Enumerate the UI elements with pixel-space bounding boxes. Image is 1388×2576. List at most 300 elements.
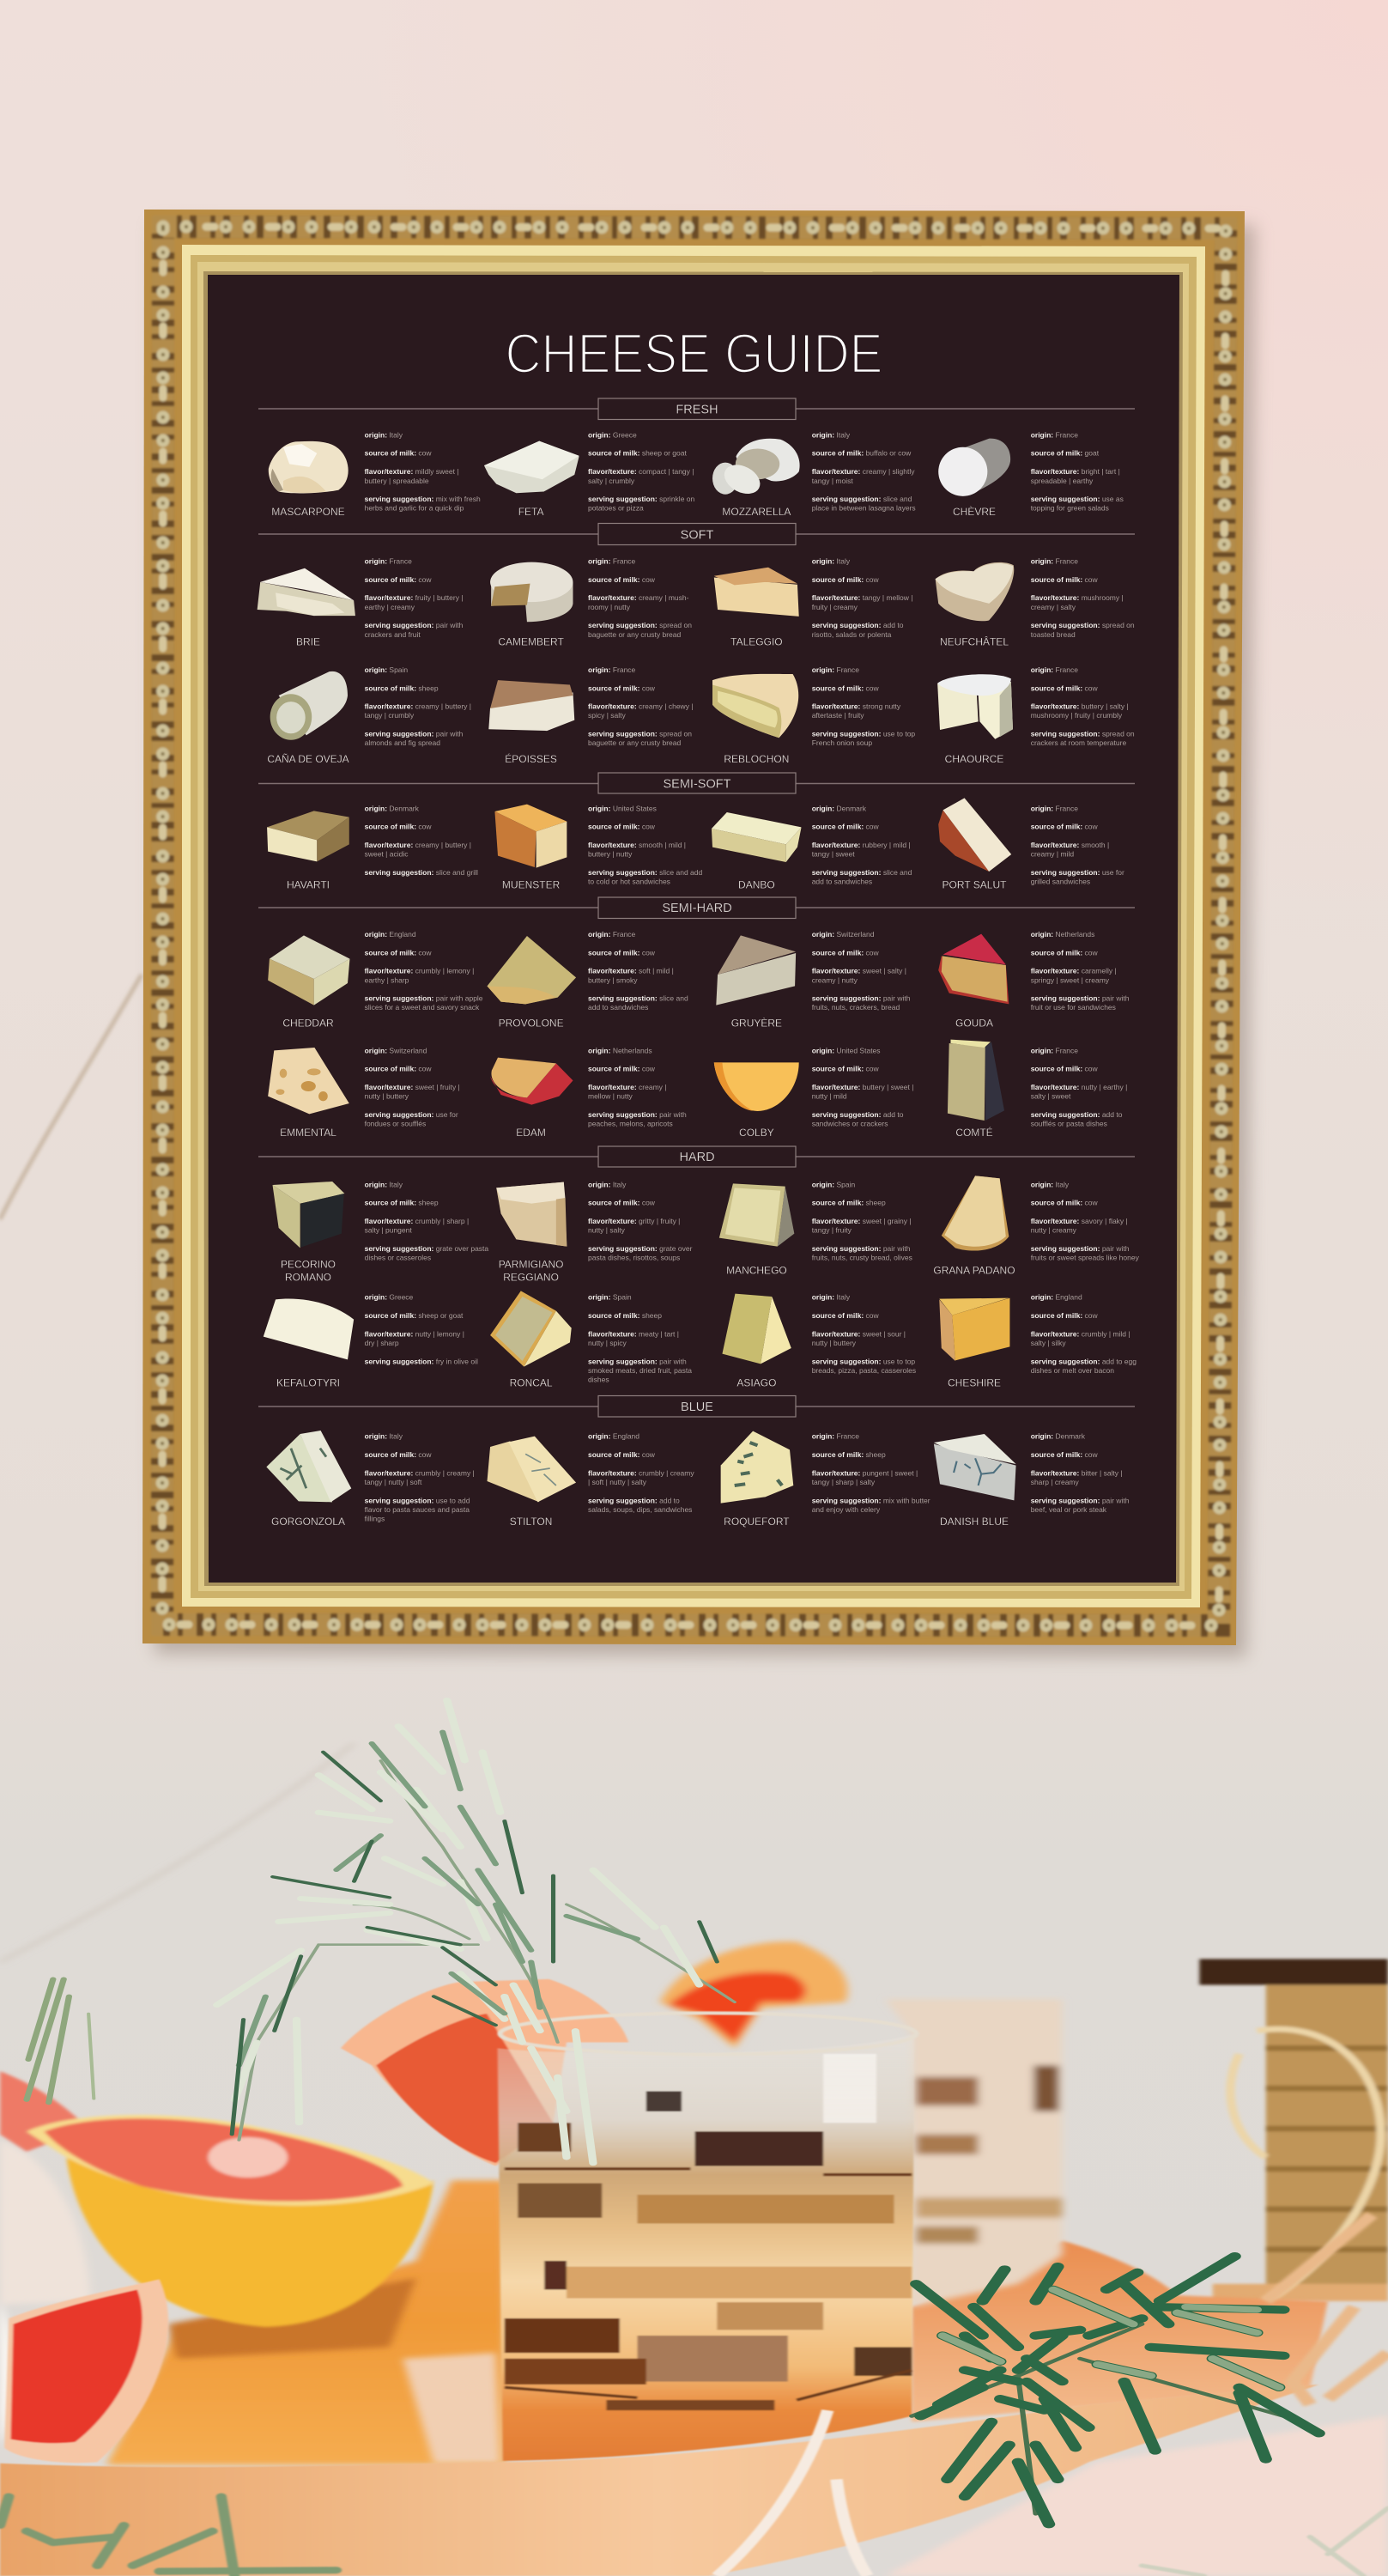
details: flavor/texture: smooth | bbox=[1031, 841, 1109, 849]
details: nutty | spicy bbox=[588, 1339, 627, 1347]
details: source of milk: cow bbox=[365, 1065, 432, 1073]
details: serving suggestion: mix with fresh bbox=[365, 495, 481, 503]
details: salty | silky bbox=[1031, 1339, 1066, 1347]
icon: chaource bbox=[937, 674, 1013, 739]
rosemary sprig on tray bbox=[912, 2257, 1319, 2524]
details: to cold or hot sandwiches bbox=[588, 877, 670, 885]
name: STILTON bbox=[510, 1516, 552, 1528]
details: soufflés or pasta dishes bbox=[1031, 1120, 1107, 1128]
details: flavor/texture: crumbly | lemony | bbox=[365, 967, 474, 975]
details bbox=[365, 431, 481, 513]
details: origin: France bbox=[588, 930, 636, 939]
details: French onion soup bbox=[812, 738, 872, 747]
rosemary sprig in glass bbox=[217, 1700, 735, 2163]
details: serving suggestion: sprinkle on bbox=[588, 495, 695, 503]
details: serving suggestion: use as bbox=[1031, 495, 1124, 503]
details: tangy | crumbly bbox=[365, 711, 415, 720]
details: source of milk: cow bbox=[365, 449, 432, 458]
details: serving suggestion: add to bbox=[588, 1496, 680, 1504]
details: tangy | sharp | salty bbox=[812, 1478, 876, 1486]
details: serving suggestion: pair with bbox=[588, 1357, 687, 1365]
cheese: provolone bbox=[487, 930, 688, 1030]
name: HAVARTI bbox=[287, 879, 330, 891]
name: FETA bbox=[518, 506, 543, 518]
details: potatoes or pizza bbox=[588, 504, 644, 513]
details: flavor/texture: bitter | salty | bbox=[1031, 1468, 1123, 1477]
details: fruits, nuts, crusty bread, olives bbox=[812, 1254, 912, 1262]
details: serving suggestion: slice and bbox=[588, 994, 688, 1003]
cheese: pecorino romano bbox=[272, 1180, 488, 1283]
faint background branch bbox=[0, 1743, 354, 1962]
name line 2: REGGIANO bbox=[503, 1271, 559, 1283]
details: mushroomy | fruity | crumbly bbox=[1031, 711, 1123, 720]
cheese: grana padano bbox=[933, 1176, 1140, 1276]
icon: cana de oveja bbox=[270, 671, 348, 740]
details: source of milk: cow bbox=[812, 823, 880, 831]
cheese: brie bbox=[258, 556, 464, 647]
details: source of milk: cow bbox=[365, 949, 432, 957]
grapefruit wedge bbox=[4, 2279, 168, 2463]
details: flavor/texture: strong nutty bbox=[812, 702, 901, 710]
cheese: danish blue bbox=[934, 1432, 1130, 1528]
details: flavor/texture: crumbly | sharp | bbox=[365, 1217, 469, 1225]
icon: pecorino romano bbox=[272, 1182, 344, 1248]
icon: port salut bbox=[938, 798, 1011, 872]
icon: cheshire bbox=[939, 1298, 1009, 1361]
floating rosemary sprig bbox=[27, 1979, 94, 2103]
details: aftertaste | fruity bbox=[812, 711, 864, 720]
details: flavor/texture: nutty | lemony | bbox=[365, 1329, 464, 1338]
details: serving suggestion: use for bbox=[1031, 868, 1124, 877]
details: fruits or sweet spreads like honey bbox=[1031, 1254, 1140, 1262]
details: nutty | salty bbox=[588, 1226, 626, 1235]
icon: feta bbox=[484, 441, 579, 493]
name: COLBY bbox=[739, 1127, 774, 1139]
details: baguette or any crusty bread bbox=[588, 738, 681, 747]
details: serving suggestion: add to bbox=[1031, 1110, 1123, 1119]
details bbox=[365, 930, 483, 1012]
details: salads, soups, dips, sandwiches bbox=[588, 1505, 692, 1514]
icon: provolone bbox=[487, 936, 576, 1004]
icon: comte bbox=[948, 1040, 1004, 1121]
icon: emmental bbox=[268, 1048, 349, 1114]
details: serving suggestion: pair with bbox=[1031, 1496, 1130, 1504]
name: GORGONZOLA bbox=[271, 1516, 345, 1528]
icon: cheddar bbox=[268, 935, 349, 1005]
tray surface left bbox=[106, 2180, 505, 2465]
name: KEFALOTYRI bbox=[276, 1377, 340, 1389]
details: source of milk: sheep bbox=[588, 1311, 662, 1320]
icon: mascarpone bbox=[269, 441, 349, 493]
white objects left bbox=[0, 2140, 90, 2445]
details: buttery | nutty bbox=[588, 850, 633, 859]
details: tangy | sweet bbox=[812, 850, 855, 859]
details: origin: France bbox=[1031, 665, 1078, 674]
details: flavor/texture: soft | mild | bbox=[588, 967, 674, 975]
details bbox=[588, 930, 688, 1012]
icon: roquefort bbox=[721, 1431, 793, 1504]
details: flavor/texture: buttery | salty | bbox=[1031, 702, 1129, 710]
details: origin: France bbox=[1031, 1046, 1078, 1054]
details: flavor/texture: creamy | chewy | bbox=[588, 702, 694, 710]
details: source of milk: cow bbox=[588, 683, 656, 692]
details: flavor/texture: tangy | mellow | bbox=[812, 593, 912, 602]
details: origin: Italy bbox=[1031, 1180, 1070, 1188]
details: add to sandwiches bbox=[812, 877, 872, 885]
icon: brie bbox=[258, 568, 355, 616]
details: origin: France bbox=[588, 556, 636, 565]
cheese: roquefort bbox=[721, 1431, 930, 1528]
details: source of milk: cow bbox=[1031, 1199, 1099, 1207]
details: origin: United States bbox=[588, 804, 657, 812]
details: origin: England bbox=[1031, 1293, 1082, 1302]
details: source of milk: cow bbox=[1031, 949, 1099, 957]
section heading: fresh: FRESH bbox=[676, 404, 718, 417]
details: source of milk: cow bbox=[365, 575, 432, 584]
details: serving suggestion: pair with bbox=[365, 730, 464, 738]
details: serving suggestion: mix with butter bbox=[812, 1496, 930, 1504]
cheese: manchego bbox=[719, 1180, 912, 1276]
details: crackers at room temperature bbox=[1031, 738, 1126, 747]
details: flavor to pasta sauces and pasta bbox=[365, 1505, 470, 1514]
icon: colby bbox=[714, 1062, 799, 1111]
cheese: asiago bbox=[722, 1293, 916, 1389]
details: serving suggestion: pair with bbox=[1031, 1244, 1130, 1253]
poster bbox=[208, 275, 1179, 1583]
details: flavor/texture: sweet | grainy | bbox=[812, 1217, 912, 1225]
details: dry | sharp bbox=[365, 1339, 399, 1347]
details: origin: United States bbox=[812, 1046, 881, 1054]
details: flavor/texture: crumbly | creamy | bbox=[365, 1468, 475, 1477]
details bbox=[588, 804, 702, 885]
name: ROQUEFORT bbox=[724, 1516, 790, 1528]
details: origin: Italy bbox=[812, 431, 851, 440]
details: origin: Italy bbox=[365, 431, 403, 440]
details: flavor/texture: buttery | sweet | bbox=[812, 1083, 913, 1091]
details: dishes or casseroles bbox=[365, 1254, 431, 1262]
details: flavor/texture: mildly sweet | bbox=[365, 467, 459, 476]
name: PECORINO bbox=[281, 1259, 336, 1271]
details: fruit or use for sandwiches bbox=[1031, 1003, 1116, 1012]
details bbox=[812, 930, 911, 1012]
name: NEUFCHÂTEL bbox=[940, 635, 1009, 647]
details: flavor/texture: mushroomy | bbox=[1031, 593, 1124, 602]
details: flavor/texture: bright | tart | bbox=[1031, 467, 1120, 476]
details bbox=[812, 665, 915, 747]
details: origin: England bbox=[365, 930, 416, 939]
details: source of milk: cow bbox=[1031, 683, 1099, 692]
icon: stilton bbox=[487, 1437, 576, 1502]
details: origin: France bbox=[812, 665, 859, 674]
details: grilled sandwiches bbox=[1031, 877, 1090, 885]
details: slices for a sweet and savory snack bbox=[365, 1003, 480, 1012]
details bbox=[365, 804, 478, 877]
icon: asiago bbox=[722, 1294, 791, 1364]
details bbox=[812, 804, 912, 885]
cheese: kefalotyri bbox=[264, 1293, 478, 1389]
details: fillings bbox=[365, 1515, 385, 1523]
details: origin: Netherlands bbox=[588, 1046, 652, 1054]
name: TALEGGIO bbox=[730, 635, 783, 647]
name: BRIE bbox=[296, 635, 320, 647]
name: CHEDDAR bbox=[282, 1018, 334, 1030]
name: MUENSTER bbox=[502, 879, 561, 891]
details: serving suggestion: spread on bbox=[588, 621, 692, 629]
section heading: semi-hard bbox=[258, 897, 1135, 919]
name: RONCAL bbox=[510, 1377, 553, 1389]
details: source of milk: sheep bbox=[812, 1450, 886, 1459]
icon: parmigiano reggiano bbox=[496, 1182, 567, 1247]
details: flavor/texture: creamy | mush- bbox=[588, 593, 689, 602]
icon: taleggio bbox=[714, 568, 799, 617]
details: breads, pizza, pasta, casseroles bbox=[812, 1366, 916, 1375]
details: peaches, melons, apricots bbox=[588, 1120, 673, 1128]
details bbox=[812, 1432, 930, 1514]
cheese: emmental bbox=[268, 1046, 460, 1139]
details: serving suggestion: add to egg bbox=[1031, 1357, 1136, 1365]
details: creamy | salty bbox=[1031, 603, 1076, 611]
details: flavor/texture: creamy | buttery | bbox=[365, 841, 471, 849]
details bbox=[365, 665, 471, 747]
details: origin: Greece bbox=[588, 431, 637, 440]
details: dishes or melt over bacon bbox=[1031, 1366, 1114, 1375]
icon: mozzarella bbox=[712, 439, 800, 500]
cheese: roncal bbox=[490, 1291, 692, 1389]
details: spreadable | earthy bbox=[1031, 477, 1094, 485]
cheese: gruyere bbox=[716, 930, 911, 1030]
icon: gorgonzola bbox=[266, 1431, 351, 1502]
cheese: danbo bbox=[712, 804, 912, 891]
tray surface right bbox=[912, 2241, 1328, 2421]
details: source of milk: sheep or goat bbox=[588, 449, 687, 458]
name: PARMIGIANO bbox=[499, 1259, 563, 1271]
details: flavor/texture: nutty | earthy | bbox=[1031, 1083, 1127, 1091]
front glass bbox=[498, 2013, 916, 2461]
details: origin: Italy bbox=[812, 556, 851, 565]
cheese: cheddar bbox=[268, 930, 483, 1030]
details: origin: France bbox=[1031, 556, 1078, 565]
icon: danish blue bbox=[934, 1434, 1016, 1500]
details: fruits, nuts, crackers, bread bbox=[812, 1003, 900, 1012]
details: mellow | nutty bbox=[588, 1092, 633, 1101]
details: toasted bread bbox=[1031, 630, 1076, 639]
details bbox=[812, 556, 912, 639]
icon: muenster bbox=[494, 805, 567, 868]
details: origin: Denmark bbox=[1031, 1432, 1086, 1441]
details: flavor/texture: caramelly | bbox=[1031, 967, 1117, 975]
details: crackers and fruit bbox=[365, 630, 421, 639]
name: CAMEMBERT bbox=[498, 635, 564, 647]
details bbox=[1031, 1180, 1140, 1262]
cheese: colby bbox=[714, 1046, 913, 1139]
details: origin: France bbox=[365, 556, 412, 565]
details: flavor/texture: compact | tangy | bbox=[588, 467, 694, 476]
details: flavor/texture: meaty | tart | bbox=[588, 1329, 679, 1338]
details: serving suggestion: slice and bbox=[812, 495, 912, 503]
cheese: chevre bbox=[938, 431, 1124, 518]
details bbox=[588, 556, 692, 639]
details: | soft | nutty | salty bbox=[588, 1478, 647, 1486]
details: source of milk: cow bbox=[1031, 575, 1099, 584]
cheese: port salut bbox=[938, 798, 1124, 891]
name: COMTÉ bbox=[955, 1126, 993, 1139]
details: serving suggestion: grate over bbox=[588, 1244, 693, 1253]
frame drop shadow bbox=[155, 223, 1255, 1657]
details: serving suggestion: pair with bbox=[365, 621, 464, 629]
details: almonds and fig spread bbox=[365, 738, 440, 747]
cheese: feta bbox=[484, 431, 695, 518]
name: MOZZARELLA bbox=[722, 506, 791, 518]
section heading: blue: BLUE bbox=[681, 1400, 713, 1414]
details: flavor/texture: fruity | buttery | bbox=[365, 593, 464, 602]
icon: havarti bbox=[267, 811, 349, 861]
details: salty | pungent bbox=[365, 1226, 412, 1235]
shadow under grapefruit bbox=[168, 2278, 416, 2359]
details: flavor/texture: sweet | fruity | bbox=[365, 1083, 460, 1091]
details: flavor/texture: rubbery | mild | bbox=[812, 841, 911, 849]
details: origin: Italy bbox=[365, 1180, 403, 1188]
details: herbs and garlic for a quick dip bbox=[365, 504, 464, 513]
details: tangy | nutty | soft bbox=[365, 1478, 422, 1486]
icon: reblochon bbox=[712, 674, 798, 738]
details: nutty | creamy bbox=[1031, 1226, 1077, 1235]
photo scene: cocktail on tray bbox=[0, 1700, 1388, 2576]
cheese: cheshire bbox=[939, 1293, 1136, 1389]
details: salty | crumbly bbox=[588, 477, 635, 485]
details bbox=[365, 1293, 478, 1365]
details: source of milk: goat bbox=[1031, 449, 1100, 458]
name: CHAOURCE bbox=[945, 753, 1003, 765]
details: flavor/texture: crumbly | mild | bbox=[1031, 1329, 1130, 1338]
details: earthy | creamy bbox=[365, 603, 415, 611]
details bbox=[1031, 1432, 1130, 1514]
icon: kefalotyri bbox=[264, 1299, 354, 1359]
cheese: parmigiano reggiano bbox=[496, 1180, 693, 1283]
details: dishes bbox=[588, 1376, 609, 1384]
details: creamy | mild bbox=[1031, 850, 1074, 859]
details: flavor/texture: gritty | fruity | bbox=[588, 1217, 680, 1225]
details bbox=[812, 1046, 913, 1128]
cheese: comte bbox=[948, 1040, 1127, 1139]
name: DANISH BLUE bbox=[940, 1516, 1009, 1528]
details: source of milk: cow bbox=[1031, 1065, 1099, 1073]
details: flavor/texture: savory | flaky | bbox=[1031, 1217, 1128, 1225]
icon: chevre bbox=[938, 439, 1010, 496]
details: serving suggestion: spread on bbox=[1031, 730, 1135, 738]
details: serving suggestion: pair with bbox=[588, 1110, 687, 1119]
details bbox=[812, 1180, 912, 1262]
details bbox=[812, 1293, 916, 1375]
section heading: blue bbox=[258, 1396, 1135, 1417]
cheese: mozzarella bbox=[712, 431, 916, 518]
cheese: neufchatel bbox=[936, 556, 1135, 647]
grapefruit half bbox=[0, 2071, 433, 2327]
tray handle bbox=[1266, 2215, 1388, 2404]
name: DANBO bbox=[738, 879, 775, 891]
details bbox=[365, 1046, 460, 1128]
details: origin: Denmark bbox=[365, 804, 420, 812]
details bbox=[365, 556, 464, 639]
details: source of milk: cow bbox=[812, 683, 880, 692]
details: sharp | creamy bbox=[1031, 1478, 1080, 1486]
details bbox=[588, 1046, 687, 1128]
name: CAÑA DE OVEJA bbox=[267, 753, 349, 765]
section heading: hard: HARD bbox=[679, 1151, 715, 1164]
details: serving suggestion: spread on bbox=[588, 730, 692, 738]
icon: manchego bbox=[719, 1183, 794, 1247]
icon: gouda bbox=[938, 934, 1009, 1004]
cheese: cana de oveja bbox=[267, 665, 471, 765]
icon: epoisses bbox=[488, 680, 574, 731]
section heading: soft: SOFT bbox=[681, 529, 713, 543]
details: source of milk: sheep bbox=[365, 1199, 439, 1207]
icon: roncal bbox=[490, 1291, 572, 1367]
details: source of milk: buffalo or cow bbox=[812, 449, 912, 458]
cheese: gorgonzola bbox=[266, 1431, 475, 1528]
name: ÉPOISSES bbox=[505, 752, 557, 765]
details: source of milk: cow bbox=[365, 823, 432, 831]
cheese: reblochon bbox=[712, 665, 915, 765]
details: origin: Italy bbox=[588, 1180, 627, 1188]
cheese: camembert bbox=[490, 556, 692, 647]
details bbox=[1031, 930, 1130, 1012]
cheese: chaource bbox=[937, 665, 1135, 765]
name: ASIAGO bbox=[736, 1377, 776, 1389]
details: source of milk: cow bbox=[812, 949, 880, 957]
details: and enjoy with celery bbox=[812, 1505, 881, 1514]
details: flavor/texture: creamy | slightly bbox=[812, 467, 915, 476]
details: serving suggestion: grate over pasta bbox=[365, 1244, 488, 1253]
details: flavor/texture: creamy | buttery | bbox=[365, 702, 471, 710]
blurred twig on wall bbox=[0, 975, 142, 1219]
details bbox=[1031, 431, 1124, 513]
details: origin: France bbox=[1031, 431, 1078, 440]
details: source of milk: sheep or goat bbox=[365, 1311, 464, 1320]
details: topping for green salads bbox=[1031, 504, 1109, 513]
details: tangy | fruity bbox=[812, 1226, 852, 1235]
details: add to sandwiches bbox=[588, 1003, 648, 1012]
section heading: hard bbox=[258, 1146, 1135, 1167]
details bbox=[588, 1293, 692, 1384]
details: origin: Spain bbox=[812, 1180, 856, 1188]
cheese: muenster bbox=[494, 804, 702, 891]
details: smoked meats, dried fruit, pasta bbox=[588, 1366, 692, 1375]
details: source of milk: cow bbox=[588, 1199, 656, 1207]
icon: edam bbox=[490, 1058, 573, 1105]
details: buttery | smoky bbox=[588, 975, 638, 984]
name: PROVOLONE bbox=[499, 1018, 564, 1030]
tray reflection bbox=[403, 2353, 500, 2464]
spool of twine bbox=[1199, 1959, 1388, 2301]
details: nutty | buttery bbox=[812, 1339, 857, 1347]
details: serving suggestion: use to top bbox=[812, 730, 915, 738]
details: source of milk: cow bbox=[812, 1065, 880, 1073]
details: source of milk: cow bbox=[588, 823, 656, 831]
details: origin: Spain bbox=[365, 665, 408, 674]
section heading: semi-soft bbox=[258, 773, 1135, 793]
details bbox=[1031, 665, 1135, 747]
details: source of milk: cow bbox=[1031, 1311, 1099, 1320]
details: beef, veal or pork steak bbox=[1031, 1505, 1107, 1514]
details: origin: France bbox=[1031, 804, 1078, 812]
section heading: fresh bbox=[258, 398, 1135, 419]
name: CHÈVRE bbox=[953, 505, 996, 518]
details: serving suggestion: spread on bbox=[1031, 621, 1135, 629]
poster background bbox=[208, 275, 1179, 1583]
details: origin: France bbox=[812, 1432, 859, 1441]
details: springy | sweet | creamy bbox=[1031, 975, 1110, 984]
details: serving suggestion: slice and grill bbox=[365, 868, 478, 877]
